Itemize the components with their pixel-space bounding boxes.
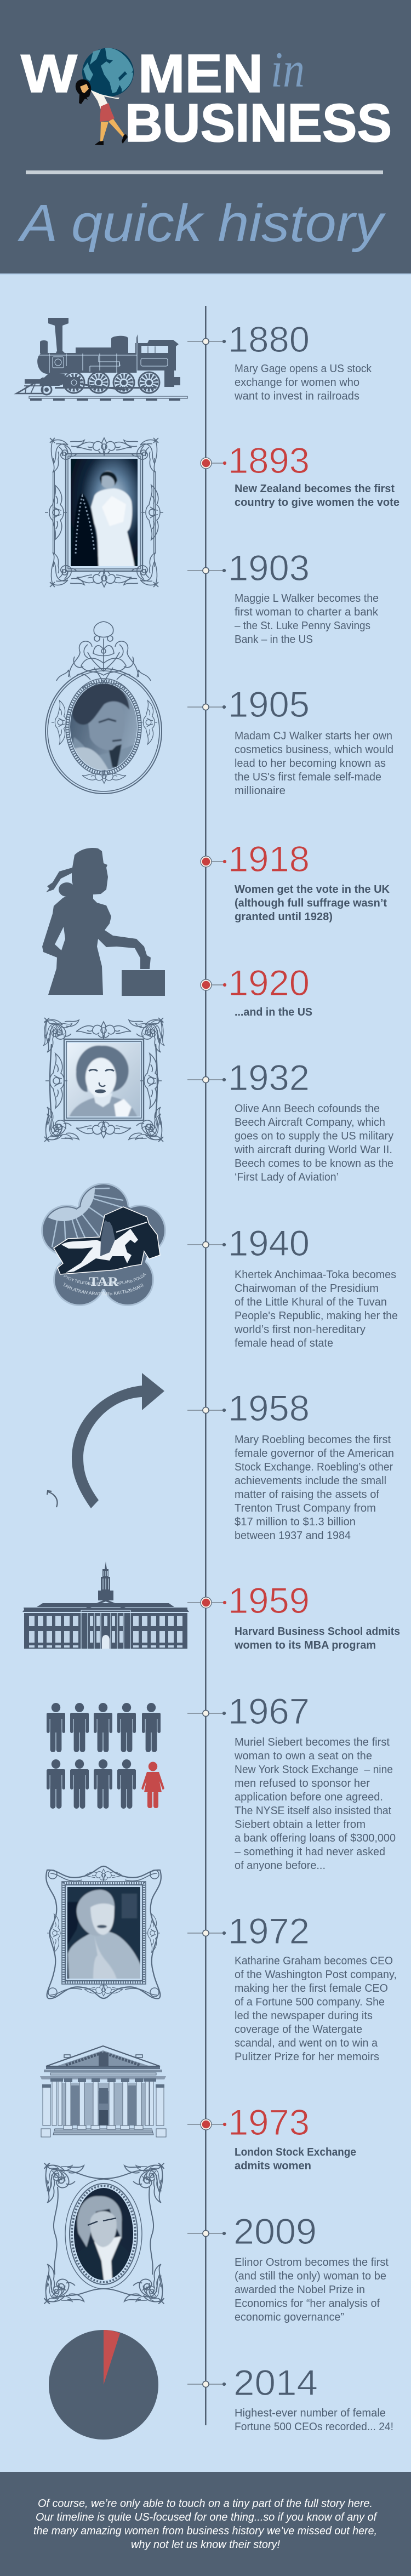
icon: woman figure	[141, 1762, 164, 1808]
entry: 1958	[47, 1373, 394, 1542]
connector	[187, 2230, 226, 2237]
connector	[187, 1710, 226, 1717]
entry: 1972	[46, 1866, 397, 2063]
portrait: ornate frame	[45, 438, 163, 587]
connector	[187, 1407, 226, 1414]
description: New Zealand becomes the first	[235, 483, 395, 495]
description: Katharine Graham becomes CEO	[235, 1955, 393, 1967]
description: achievements include the small	[235, 1475, 386, 1487]
description: matter of raising the assets of	[235, 1489, 379, 1501]
entry: 1918	[42, 839, 390, 996]
connector	[187, 567, 226, 574]
header panel	[0, 0, 411, 275]
year: 1920	[228, 962, 310, 1003]
description	[235, 2146, 356, 2172]
connector	[187, 1076, 226, 1083]
description	[235, 2407, 393, 2433]
portrait: floral frame	[41, 1018, 167, 1142]
year: 1958	[228, 1388, 310, 1428]
description: women to its MBA program	[234, 1639, 376, 1651]
description: the US's first female self-made	[235, 771, 381, 783]
description: woman to own a seat on the	[234, 1750, 372, 1762]
entry: 1973	[40, 2046, 356, 2172]
description: admits women	[235, 2160, 311, 2172]
description: of the Little Khural of the Tuvan	[235, 1296, 387, 1308]
description: of anyone before...	[235, 1860, 326, 1872]
description: Muriel Siebert becomes the first	[235, 1736, 390, 1748]
footer text: Our timeline is quite US-focused for one thing...so if you know of any of	[36, 2511, 378, 2523]
description: Olive Ann Beech cofounds the	[235, 1103, 380, 1115]
description: The NYSE itself also insisted that	[235, 1805, 391, 1817]
year: 1893	[228, 440, 310, 481]
photo	[65, 1885, 142, 1981]
description	[235, 483, 399, 509]
description: Fortune 500 CEOs recorded... 24!	[235, 2421, 393, 2433]
connector	[187, 1930, 226, 1936]
description: between 1937 and 1984	[235, 1530, 351, 1542]
description: exchange for women who	[235, 377, 359, 389]
photo	[67, 1043, 140, 1116]
portrait: oval frame	[45, 622, 162, 794]
description: millionaire	[235, 785, 286, 797]
description: Siebert obtain a letter from	[235, 1819, 366, 1831]
description: application before one agreed.	[235, 1791, 383, 1803]
entry: 1893	[45, 438, 399, 587]
columns	[43, 2081, 164, 2125]
description: (and still the only) woman to be	[235, 2270, 386, 2282]
badge lettering	[64, 1273, 146, 1296]
entry: 1932	[41, 1018, 393, 1183]
photo	[68, 457, 140, 568]
footer text: why not let us know their story!	[131, 2539, 280, 2551]
footer text: the many amazing women from business history we’ve missed out here,	[33, 2525, 377, 2537]
horse and rider	[61, 1216, 147, 1273]
description: Women get the vote in the UK	[235, 884, 390, 896]
description: – the St. Luke Penny Savings	[235, 620, 370, 632]
arches and bays	[61, 2083, 145, 2125]
connector	[201, 979, 226, 990]
timeline spine	[205, 306, 207, 2425]
description: of a Fortune 500 company. She	[235, 1996, 385, 2008]
chart: nine men and one woman pictogram	[47, 1703, 164, 1809]
year: 1959	[228, 1580, 310, 1621]
year: 1903	[228, 548, 310, 588]
photo	[70, 683, 137, 770]
photo	[74, 2188, 133, 2280]
description: Chairwoman of the Presidium	[235, 1283, 379, 1295]
description: Harvard Business School admits	[235, 1626, 400, 1638]
illustration: London Stock Exchange building	[40, 2046, 166, 2137]
connector	[187, 2381, 226, 2387]
description	[234, 1626, 400, 1651]
connector	[187, 338, 226, 345]
entry: 1959	[22, 1561, 400, 1651]
description	[235, 884, 390, 923]
entry: 1880	[16, 318, 372, 402]
description: goes on to supply the US military	[235, 1130, 393, 1142]
entry: 1903	[187, 548, 379, 646]
description: granted until 1928)	[235, 911, 333, 923]
description: Elinor Ostrom becomes the first	[235, 2256, 389, 2269]
description	[235, 1434, 394, 1542]
badge lettering: PYGY TELEGEJNIŊ PROLETAPLARЬ POLGAŞ	[64, 1273, 146, 1286]
connector	[187, 1241, 226, 1248]
description: led the newspaper during its	[235, 2010, 373, 2022]
entry: 1920	[201, 962, 312, 1018]
connector	[187, 1597, 226, 1608]
divider	[26, 170, 383, 174]
title: in: in	[271, 42, 305, 98]
year: 1940	[228, 1223, 310, 1263]
description: Maggie L Walker becomes the	[235, 592, 379, 605]
description	[234, 1269, 398, 1349]
description	[235, 592, 379, 646]
icon: curved rising arrow	[72, 1373, 164, 1508]
description: Beech Aircraft Company, which	[235, 1116, 385, 1129]
year: 1972	[228, 1911, 310, 1951]
title: Women	[21, 43, 263, 104]
entry: 2009	[44, 2163, 389, 2323]
description: Beech comes to be known as the	[235, 1158, 393, 1170]
description: scandal, and went on to win a	[235, 2037, 378, 2049]
description: Highest-ever number of female	[235, 2407, 386, 2419]
badge lettering: TARLATKAN ARATTARЬ KATTЬЗЬNARI	[64, 1283, 144, 1296]
chart: pie of female Fortune 500 CEOs	[49, 2330, 158, 2440]
description: Bank – in the US	[235, 634, 313, 646]
title: Women: MEN	[138, 43, 263, 104]
footer text	[33, 2498, 378, 2551]
connector	[187, 704, 226, 710]
description: People's Republic, making her the	[235, 1310, 398, 1322]
title: Women: W	[21, 43, 78, 104]
description: cosmetics business, which would	[235, 744, 393, 756]
description: Trenton Trust Company from	[235, 1502, 376, 1514]
plinth and steps	[53, 2129, 153, 2135]
badge lettering: TAR	[89, 1275, 118, 1289]
year: 1905	[228, 684, 310, 725]
year: 1880	[228, 319, 310, 360]
entry: 1940	[41, 1183, 398, 1349]
description	[235, 1955, 397, 2063]
entry: 1967	[47, 1691, 396, 1872]
title: Business: BUSINESS	[125, 93, 392, 153]
footer text: Of course, we’re only able to touch on a tiny part of the full story here.	[38, 2498, 373, 2510]
description	[234, 363, 372, 402]
connector	[187, 2119, 226, 2130]
description: $17 million to $1.3 billion	[235, 1516, 356, 1528]
description	[234, 1736, 396, 1872]
description: economic governance”	[235, 2311, 344, 2323]
illustration: Harvard Business School building	[22, 1561, 189, 1649]
entry: 1905	[45, 622, 393, 797]
description: London Stock Exchange	[235, 2146, 356, 2158]
connector	[201, 458, 226, 469]
description	[235, 730, 393, 797]
description: with aircraft during World War II.	[234, 1144, 392, 1156]
description: want to invest in railroads	[234, 390, 359, 402]
description	[235, 2256, 389, 2323]
description: world’s first non-hereditary	[234, 1324, 366, 1336]
description: ...and in the US	[235, 1006, 312, 1018]
description: Mary Gage opens a US stock	[235, 363, 372, 375]
connector	[201, 856, 226, 867]
description: making her the first female CEO	[235, 1982, 388, 1994]
icon: small arrow	[47, 1491, 58, 1507]
description: country to give women the vote	[235, 497, 399, 509]
description: female head of state	[235, 1337, 333, 1349]
description: – something it had never asked	[235, 1846, 385, 1858]
description: New York Stock Exchange – nine	[235, 1764, 393, 1776]
map	[54, 1207, 160, 1274]
description: Economics for “her analysis of	[235, 2298, 380, 2310]
year: 1967	[228, 1691, 310, 1731]
year: 1973	[228, 2102, 310, 2142]
icon: woman voting silhouette	[42, 848, 165, 996]
description: Khertek Anchimaa-Toka becomes	[235, 1269, 396, 1281]
year: 1918	[228, 839, 310, 879]
description: Madam CJ Walker starts her own	[235, 730, 392, 742]
description	[234, 1103, 393, 1183]
description: coverage of the Watergate	[235, 2024, 362, 2036]
emblem: Tuvan badge	[41, 1183, 166, 1306]
year: 2014	[233, 2362, 318, 2403]
description: first woman to charter a bank	[235, 606, 379, 618]
description: ‘First Lady of Aviation’	[235, 1171, 339, 1183]
description: female governor of the American	[235, 1447, 394, 1460]
icon: businesswoman carrying globe	[76, 79, 128, 145]
year: 2009	[233, 2211, 317, 2252]
footer panel	[0, 2472, 411, 2576]
entry: 2014	[49, 2330, 393, 2440]
icon: locomotive	[16, 318, 187, 401]
description: a bank offering loans of $300,000	[235, 1832, 396, 1844]
portrait: baroque frame	[46, 1866, 161, 1998]
year: 1932	[228, 1057, 310, 1098]
description: Stock Exchange. Roebling’s other	[235, 1461, 393, 1473]
description: (although full suffrage wasn’t	[235, 897, 387, 909]
description: awarded the Nobel Prize in	[235, 2284, 365, 2296]
icon: globe	[82, 48, 134, 96]
description: men refused to sponsor her	[235, 1777, 370, 1789]
portrait: scroll frame	[44, 2163, 164, 2304]
subtitle: A quick history	[18, 194, 386, 253]
description: of the Washington Post company,	[235, 1969, 397, 1981]
description: Mary Roebling becomes the first	[235, 1434, 391, 1446]
description: lead to her becoming known as	[235, 757, 386, 770]
description: Pulitzer Prize for her memoirs	[235, 2051, 379, 2063]
